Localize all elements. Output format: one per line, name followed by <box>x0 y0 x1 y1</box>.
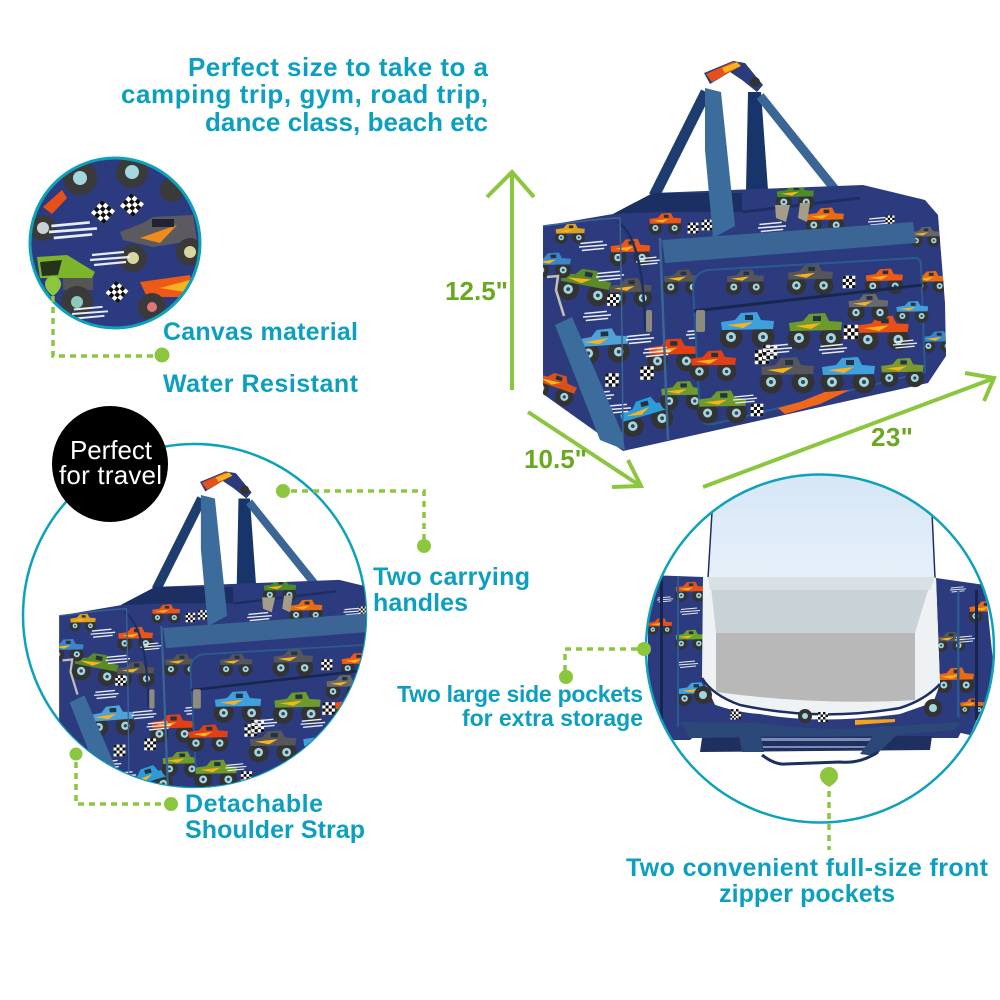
badge: perfect for travel <box>52 406 168 522</box>
label: detachable shoulder strap: Detachable <box>185 790 323 818</box>
badge: perfect for travel: Perfect <box>70 435 153 465</box>
label: two large side pockets <box>397 681 643 731</box>
label: two large side pockets: for extra storage <box>462 705 643 731</box>
label: water resistant: Water Resistant <box>163 370 359 398</box>
circle: open bag interior <box>646 470 1000 822</box>
label: two carrying handles <box>373 563 530 617</box>
dimension arrow: width <box>703 373 994 487</box>
heading: uses of the bag: Perfect size to take to a <box>188 52 489 82</box>
heading: uses of the bag: camping trip, gym, road trip, <box>121 79 488 109</box>
label: detachable shoulder strap: Shoulder Strap <box>185 816 365 844</box>
connector: shoulder strap <box>70 748 178 811</box>
label: two large side pockets: Two large side pockets <box>397 681 643 707</box>
label: two convenient front zipper pockets: zipper pockets <box>719 880 895 908</box>
connector: canvas material <box>45 276 170 362</box>
dimension: 23 inches: 23" <box>871 422 913 452</box>
connector: front zipper pockets <box>820 767 838 850</box>
label: two convenient front zipper pockets: Two convenient full-size front <box>626 854 989 882</box>
label: two carrying handles: handles <box>373 589 468 617</box>
dimension arrow: height <box>487 172 534 390</box>
dimension arrow: depth <box>528 412 641 487</box>
heading: uses of the bag: dance class, beach etc <box>205 107 488 137</box>
main bag photo <box>528 61 954 451</box>
dimension: 10.5 inches: 10.5" <box>524 444 587 474</box>
circle: canvas material close-up <box>30 156 204 328</box>
badge: perfect for travel: for travel <box>59 460 162 490</box>
connector: carrying handles <box>276 484 431 553</box>
circle: bag with handles <box>22 442 368 788</box>
label: canvas material: Canvas material <box>163 318 358 346</box>
dimension: 12.5 inches: 12.5" <box>445 276 508 306</box>
connector: side pockets <box>559 642 651 684</box>
label: detachable shoulder strap <box>185 790 365 844</box>
label: two convenient front zipper pockets <box>626 854 989 908</box>
heading: uses of the bag <box>121 52 489 137</box>
label: two carrying handles: Two carrying <box>373 563 530 591</box>
